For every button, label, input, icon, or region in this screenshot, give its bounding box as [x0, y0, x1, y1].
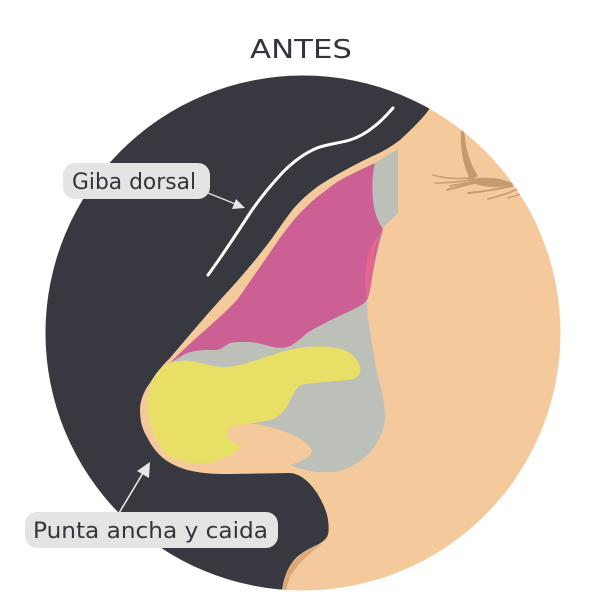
- grey cartilage: [170, 149, 398, 472]
- eye: [433, 128, 520, 199]
- eyelashes: [433, 175, 520, 199]
- label: punta ancha y caida: Punta ancha y caida: [33, 519, 268, 544]
- arrow: giba dorsal: [208, 193, 245, 209]
- label: giba dorsal: Giba dorsal: [72, 170, 196, 195]
- pink overlap: [365, 230, 382, 300]
- label: giba dorsal: [63, 163, 210, 199]
- pink cartilage: [170, 163, 383, 363]
- label: punta ancha y caida: [25, 512, 278, 548]
- dark background: [46, 76, 430, 590]
- yellow cartilage: [147, 346, 360, 463]
- dorsal hump line: [208, 108, 393, 275]
- eyelid crease: [461, 128, 478, 180]
- nostril shadow: [280, 544, 322, 592]
- title: ANTES: [250, 35, 352, 65]
- face skin: [45, 75, 561, 591]
- arrow: punta ancha: [119, 462, 150, 513]
